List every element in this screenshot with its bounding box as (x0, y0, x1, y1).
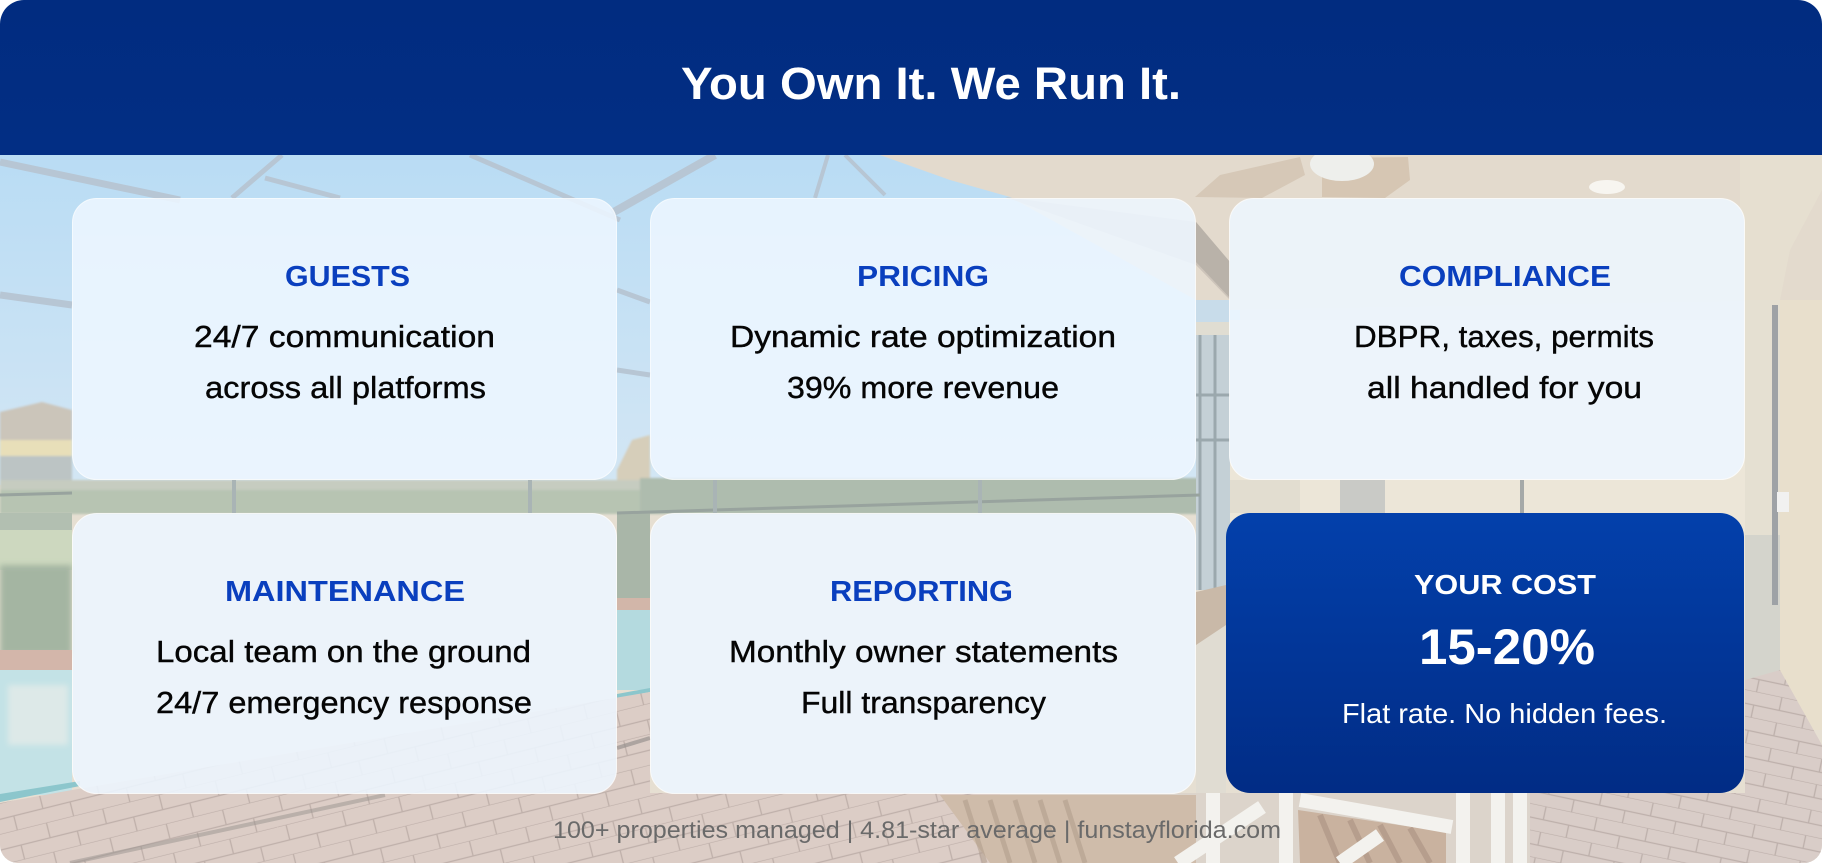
figure: fee percentage: 15-20% (1419, 619, 1595, 675)
floor bricks right (1500, 670, 1822, 863)
screen enclosure frame (0, 155, 1200, 513)
heading: maintenance: MAINTENANCE (225, 576, 465, 608)
text: maintenance details: 24/7 emergency response (156, 685, 532, 720)
text: compliance details: all handled for you (1367, 370, 1642, 405)
text: reporting details (729, 634, 1118, 720)
panel: your cost (1226, 513, 1744, 793)
neighbouring house and garden (0, 402, 1200, 514)
sky (0, 155, 1240, 485)
heading: compliance: COMPLIANCE (1399, 261, 1611, 293)
roof beam (1005, 197, 1230, 300)
panel: guests (72, 198, 616, 480)
header bar (0, 0, 1822, 155)
recessed light (1589, 180, 1625, 194)
text: reporting details: Monthly owner statements (729, 634, 1118, 669)
panel: maintenance (72, 514, 616, 794)
text: flat rate note: Flat rate. No hidden fees. (1342, 698, 1667, 729)
heading: reporting: REPORTING (830, 576, 1013, 608)
text: pricing details (730, 319, 1116, 405)
text: reporting details: Full transparency (801, 685, 1047, 720)
text: pricing details: Dynamic rate optimization (730, 319, 1116, 354)
heading: pricing: PRICING (857, 261, 989, 293)
text: pricing details: 39% more revenue (787, 370, 1059, 405)
pool (0, 610, 650, 802)
footer stats: 100+ properties managed | 4.81-star average | funstayflorida.com (553, 817, 1281, 844)
text: compliance details: DBPR, taxes, permits (1354, 319, 1654, 354)
interior wall and window (1196, 300, 1789, 680)
text: guests details: across all platforms (205, 370, 486, 405)
patio table and chairs (940, 585, 1530, 863)
title: You Own It. We Run It. (681, 58, 1181, 109)
text: guests details (194, 319, 495, 405)
heading: your cost: YOUR COST (1414, 569, 1596, 600)
text: compliance details (1354, 319, 1654, 405)
heading: guests: GUESTS (285, 261, 410, 293)
panel: reporting (650, 514, 1196, 794)
text: maintenance details: Local team on the ground (156, 634, 531, 669)
panel: pricing (650, 198, 1196, 480)
ceiling (880, 155, 1240, 300)
panel: compliance (1230, 198, 1744, 480)
text: maintenance details (156, 634, 532, 720)
hedge and bushes (0, 513, 650, 672)
text: guests details: 24/7 communication (194, 319, 495, 354)
ceiling fan (1195, 155, 1410, 198)
paver deck (0, 692, 1000, 863)
